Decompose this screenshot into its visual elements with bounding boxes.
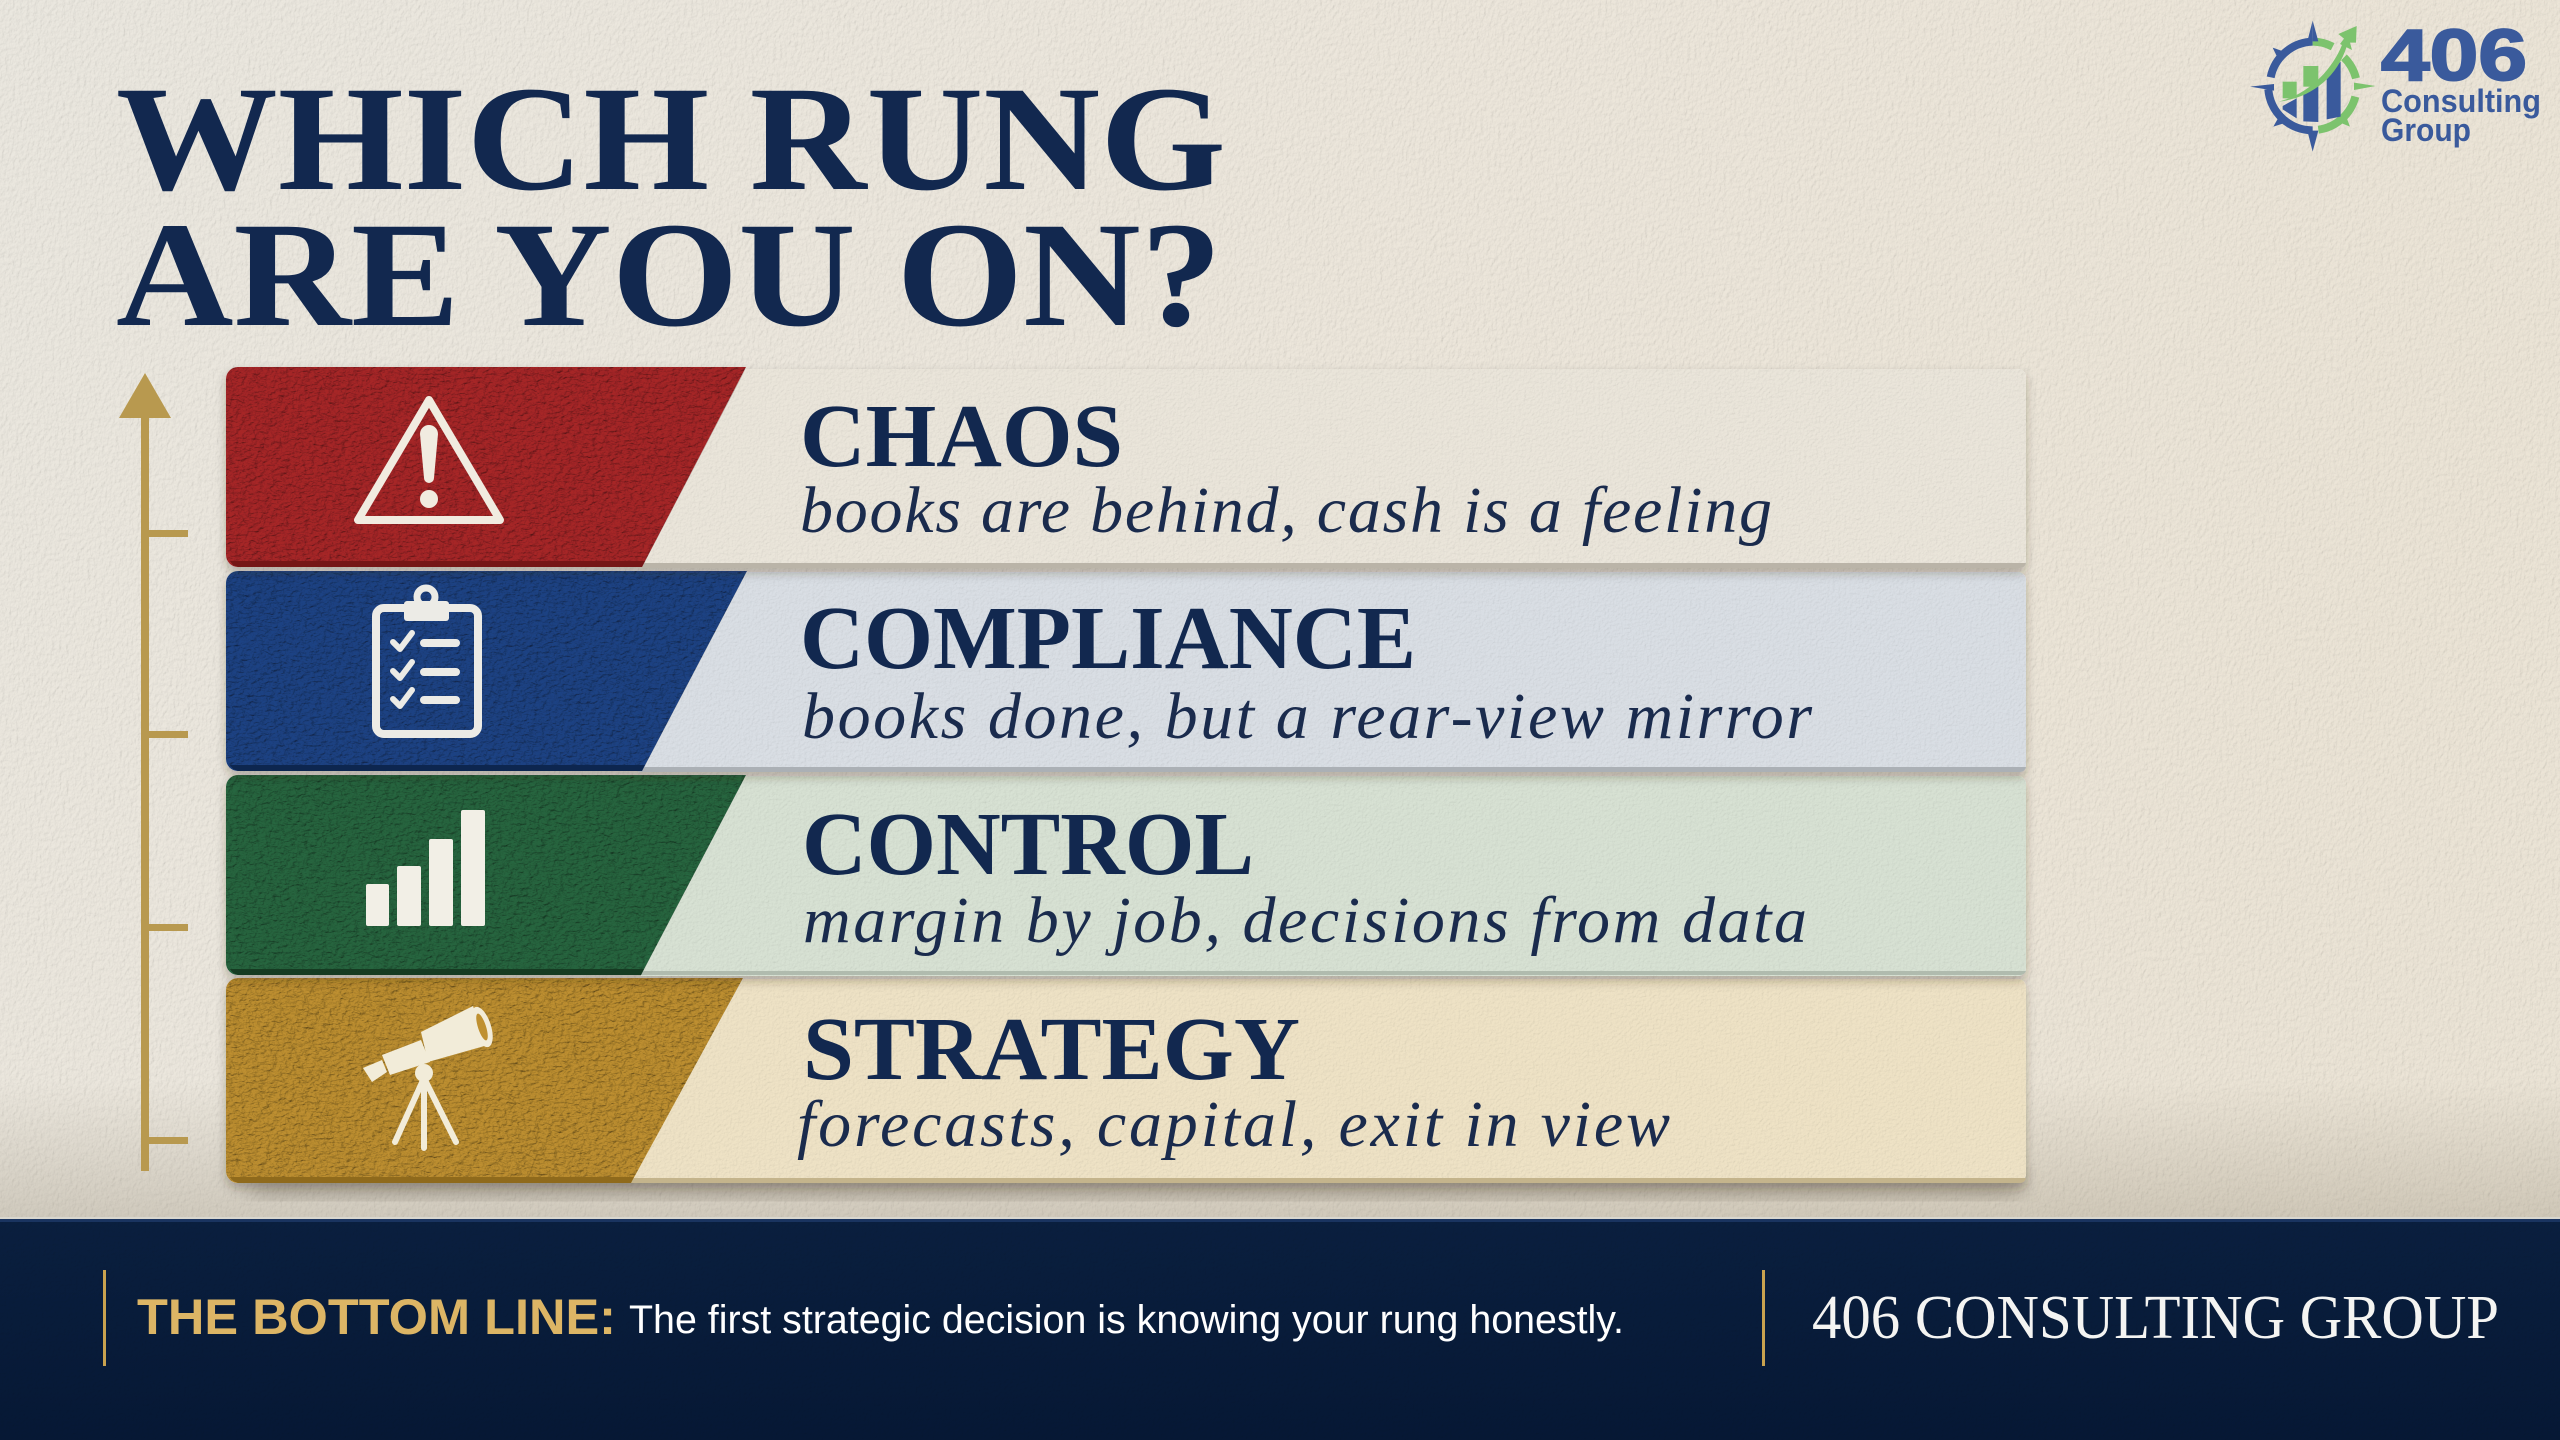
- title: ARE YOU ON?: [116, 192, 1222, 358]
- logo wordmark: [2381, 16, 2541, 148]
- strategy description: forecasts, capital, exit in view: [797, 1088, 1670, 1161]
- chaos plate: [226, 367, 2026, 568]
- bottom line text: THE BOTTOM LINE:: [137, 1289, 616, 1345]
- logo wordmark: 406: [2381, 16, 2527, 96]
- icon: telescope: [363, 1004, 497, 1148]
- ladder arrow: [119, 373, 188, 1171]
- icon: bar chart: [366, 810, 485, 926]
- control heading: CONTROL: [802, 795, 1254, 894]
- footer bar: [0, 1217, 2560, 1440]
- rung: control: [226, 775, 2026, 976]
- icon: warning triangle: [358, 400, 500, 520]
- compliance description: books done, but a rear-view mirror: [802, 680, 1812, 753]
- strategy heading: STRATEGY: [803, 1000, 1300, 1099]
- bottom line text: The first strategic decision is knowing your rung honestly.: [629, 1298, 1624, 1342]
- title: WHICH RUNG: [116, 56, 1226, 222]
- divider left: [103, 1270, 106, 1366]
- chaos heading: CHAOS: [800, 387, 1123, 486]
- brand name: 406 CONSULTING GROUP: [1812, 1284, 2499, 1352]
- logo wordmark: Consulting: [2381, 83, 2541, 119]
- soft shadow under rungs: [250, 1170, 2020, 1196]
- control plate: [226, 775, 2026, 976]
- rung: strategy: [226, 978, 2026, 1183]
- chaos description: books are behind, cash is a feeling: [800, 474, 1772, 547]
- strategy plate: [226, 978, 2026, 1183]
- title: [116, 56, 1226, 358]
- compliance plate: [226, 571, 2026, 772]
- divider right: [1762, 1270, 1765, 1366]
- rung: chaos: [226, 367, 2026, 568]
- control description: margin by job, decisions from data: [803, 884, 1807, 957]
- icon: clipboard: [376, 588, 478, 734]
- logo wordmark: Group: [2381, 112, 2471, 148]
- logo compass mark: [2250, 21, 2376, 152]
- logo: 406 Consulting Group: [2250, 16, 2541, 152]
- bottom line text: [137, 1289, 1624, 1345]
- compliance heading: COMPLIANCE: [800, 589, 1416, 688]
- rung: compliance: [226, 571, 2026, 772]
